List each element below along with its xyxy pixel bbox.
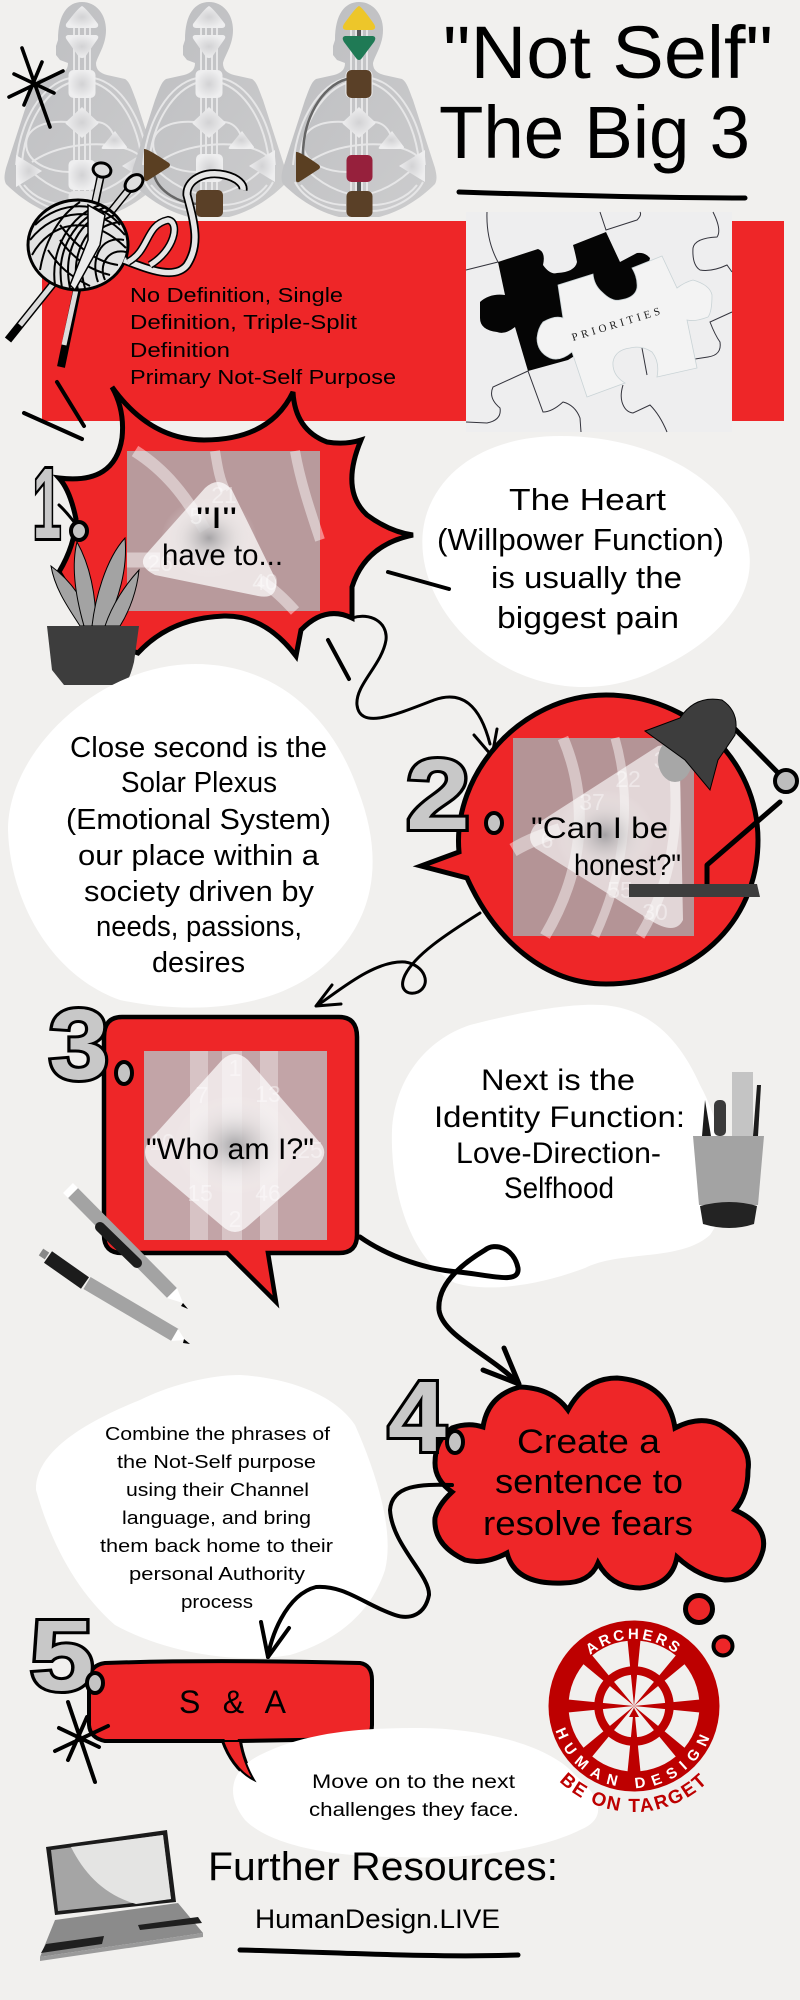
channel image: solar plexus: 6 [541, 827, 553, 853]
callout: identity function: Identity Function: [434, 1101, 685, 1134]
bubble text: honest?" [574, 849, 681, 882]
arrow: step 2 to step 3 [316, 913, 480, 1006]
bodygraph: triple-split definition [282, 2, 436, 217]
channel image: g center: 10 [149, 1129, 175, 1155]
banner text [130, 285, 396, 389]
channel image: g center: 15 [187, 1180, 213, 1206]
callout: solar plexus: (Emotional System) [66, 804, 331, 836]
callout: combine the phrases: the Not-Self purpose [117, 1452, 316, 1472]
callout: solar plexus: needs, passions, [96, 911, 302, 943]
callout: combine the phrases: personal Authority [129, 1564, 305, 1584]
banner text: Primary Not-Self Purpose [130, 367, 396, 389]
channel image: solar plexus: 22 [615, 766, 641, 792]
channel image: g center [144, 1051, 327, 1240]
bubble text: "Who am I?" [146, 1133, 314, 1166]
number 3 [49, 989, 132, 1101]
icon: desk lamp [629, 699, 797, 897]
arrow: step 4 to step 5 [261, 1485, 452, 1657]
channel image: heart center: 40 [252, 569, 278, 595]
callout: solar plexus: desires [152, 947, 245, 979]
arrow: step 3 to step 4 [360, 1237, 519, 1384]
callout: combine the phrases: Combine the phrases of [105, 1424, 331, 1444]
callout: solar plexus [8, 664, 373, 1008]
logo: archers human design [548, 1620, 720, 1812]
cloud text: Create a [517, 1423, 660, 1461]
bodygraph: no definition [4, 2, 160, 217]
asterisk lower left [55, 1702, 108, 1782]
channel image: solar plexus: 30 [642, 899, 668, 925]
cloud text: resolve fears [483, 1505, 693, 1543]
callout: combine the phrases [36, 1375, 388, 1658]
cloud text [483, 1423, 693, 1543]
burst text: have to... [162, 539, 283, 572]
number 3: 3 [49, 989, 109, 1101]
link: humandesign.live: HumanDesign.LIVE [255, 1904, 500, 1934]
banner text: Definition, Triple-Split [130, 312, 358, 334]
channel image: solar plexus: 3 [654, 747, 666, 773]
heading: further resources: Further Resources: [208, 1845, 558, 1889]
number 1: 1 [33, 448, 61, 560]
channel image: solar plexus [513, 738, 694, 936]
icon: potted plant [47, 538, 139, 685]
logo lettering: HUMAN DESIGN [556, 1727, 710, 1788]
accent dashes near burst [24, 382, 84, 439]
panel: step 2 round bubble [421, 695, 758, 984]
callout: solar plexus: our place within a [78, 840, 320, 872]
callout: solar plexus: Solar Plexus [121, 767, 277, 799]
number 2: 2 [406, 739, 470, 851]
bodygraph: single definition [132, 2, 286, 217]
cloud text: sentence to [495, 1463, 683, 1501]
channel image: heart center: 21 [211, 482, 237, 508]
channel image: g center: 46 [255, 1180, 281, 1206]
callout: identity function [392, 1005, 724, 1287]
callout: combine the phrases: them back home to their [100, 1536, 333, 1556]
callout: the heart: (Willpower Function) [437, 522, 724, 557]
title: "Not Self" [443, 11, 773, 94]
asterisk top left [9, 48, 63, 127]
yarn ball with knitting needles [8, 161, 243, 367]
number 2 [406, 739, 502, 851]
callout: combine the phrases: language, and bring [122, 1508, 311, 1528]
callout: the heart: The Heart [509, 482, 666, 517]
logo lettering [556, 1628, 710, 1812]
callout: identity function: Love-Direction- [456, 1137, 661, 1170]
channel image: solar plexus: 55 [607, 877, 633, 903]
channel image: heart center [127, 451, 320, 611]
callout: combine the phrases: using their Channel [126, 1480, 309, 1500]
channel image: g center: 1 [229, 1055, 241, 1081]
title: The Big 3 [439, 91, 750, 174]
channel image: g center: 7 [196, 1082, 208, 1108]
panel: step 5 speech bubble: S & A [179, 1684, 287, 1720]
logo lettering: ARCHERS [588, 1628, 680, 1655]
banner text: No Definition, Single [130, 285, 343, 307]
accent dashes [328, 572, 449, 679]
callout: solar plexus: society driven by [84, 876, 315, 908]
link: humandesign.live [240, 1904, 518, 1956]
icon: pencil cup [693, 1072, 764, 1228]
channel image: solar plexus: 37 [579, 789, 605, 815]
number 4: 4 [388, 1361, 446, 1473]
arrow: step 1 to step 2 [352, 616, 497, 756]
icon: pens [41, 1188, 190, 1344]
callout: identity function: Next is the [481, 1064, 635, 1097]
bubble text [531, 812, 681, 882]
channel image: g center: 2 [229, 1206, 241, 1232]
panel: step 5 speech bubble [89, 1661, 372, 1780]
logo spokes [568, 1640, 700, 1772]
banner text: Definition [130, 340, 230, 362]
callout: move on: Move on to the next [312, 1772, 516, 1793]
panel: step 1 burst [59, 387, 413, 656]
burst text [162, 502, 283, 572]
bubble text: "Can I be [531, 812, 668, 845]
number 5: 5 [30, 1600, 94, 1712]
channel image: g center: 13 [255, 1081, 281, 1107]
icon: laptop [40, 1830, 203, 1961]
channel image: heart center: 5 [190, 503, 202, 529]
burst text: "I" [196, 502, 237, 535]
channel image: g center: 25 [297, 1137, 323, 1163]
callout: identity function: Selfhood [504, 1172, 614, 1205]
panel: step 4 thought cloud [435, 1378, 764, 1588]
panel: step 3 speech bubble [104, 1017, 357, 1302]
thought bubble dots [686, 1596, 732, 1656]
puzzle photo: priorities [466, 212, 732, 432]
puzzle photo: priorities: PRIORITIES [570, 305, 665, 344]
callout: solar plexus: Close second is the [70, 732, 327, 764]
red banner [42, 221, 784, 421]
callout: move on: challenges they face. [309, 1800, 519, 1821]
callout: the heart: is usually the [491, 560, 682, 595]
title [439, 11, 773, 198]
logo lettering: BE ON TARGET [560, 1772, 704, 1812]
callout: the heart [422, 436, 750, 687]
callout: the heart: biggest pain [497, 600, 679, 635]
callout: move on [223, 1728, 598, 1858]
channel image: heart center: 26 [147, 550, 173, 576]
callout: combine the phrases: process [181, 1592, 253, 1612]
